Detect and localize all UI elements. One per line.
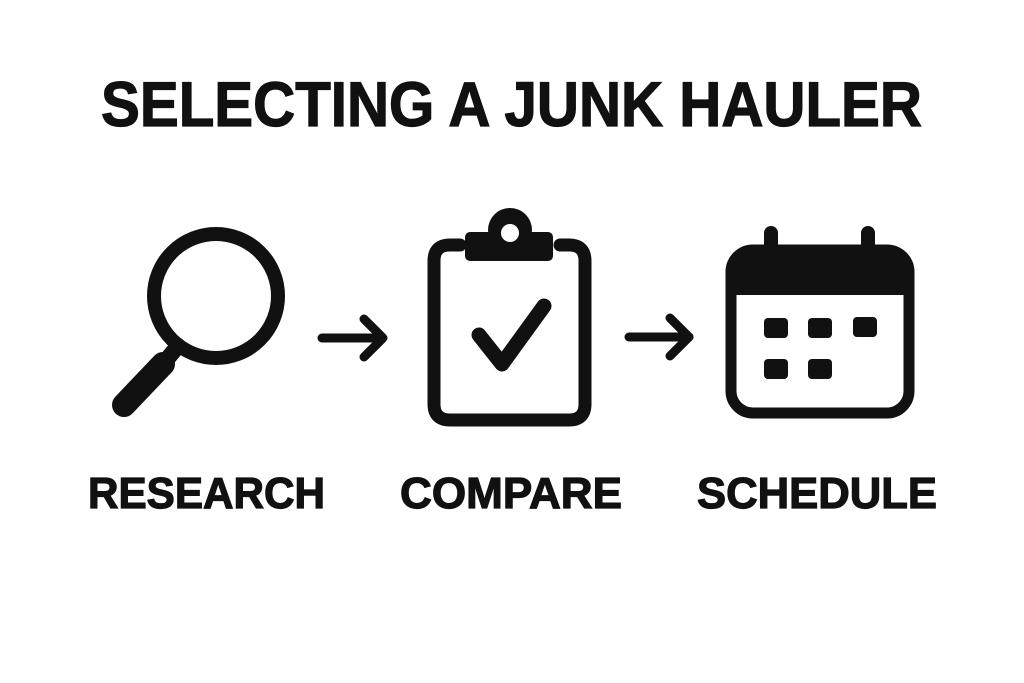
icon: magnifying glass	[124, 234, 278, 405]
title: SELECTING A JUNK HAULER	[101, 70, 922, 140]
arrow 1	[322, 319, 383, 357]
icon: calendar	[731, 233, 909, 413]
label: schedule: SCHEDULE	[697, 469, 937, 518]
label: compare: COMPARE	[400, 469, 622, 518]
icon: clipboard with check	[434, 208, 585, 420]
arrow 2	[629, 318, 689, 356]
label: research: RESEARCH	[88, 469, 325, 518]
